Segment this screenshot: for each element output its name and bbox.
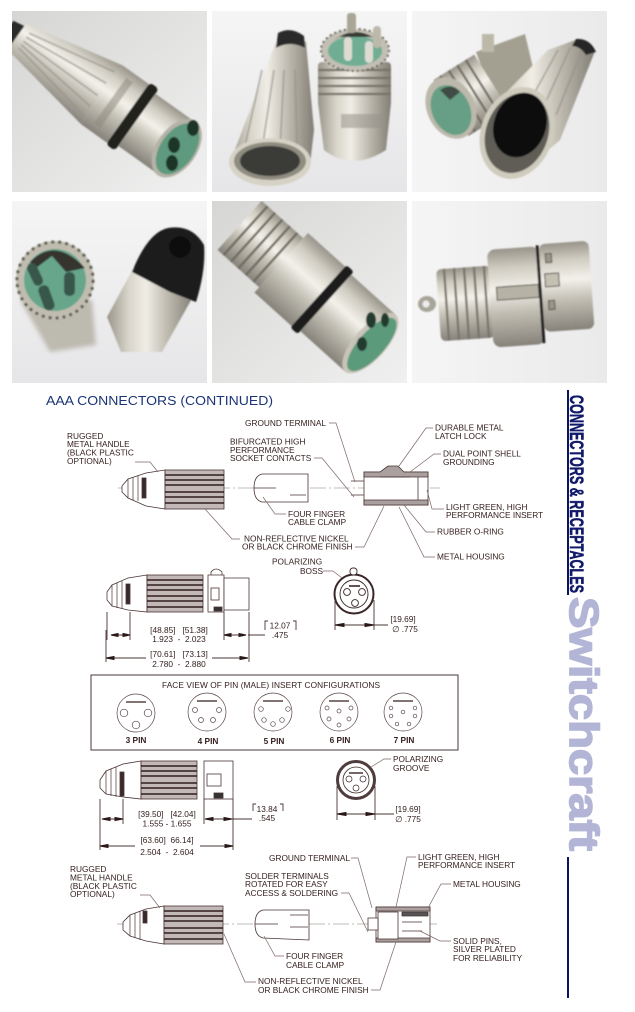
labels: female connector callouts: BIFURCATED HIGH xyxy=(230,436,305,446)
labels: female connector callouts: LIGHT GREEN, HIGH xyxy=(446,502,527,512)
sidebar heading: CONNECTORS & RECEPTACLES xyxy=(565,395,586,593)
labels: female connector callouts: SOCKET CONTACTS xyxy=(230,453,312,463)
labels: groove: ∅ .775 xyxy=(395,814,421,824)
labels: side view dimensions: 1.923 - 2.023 xyxy=(152,634,206,644)
labels: female connector callouts: CABLE CLAMP xyxy=(288,517,347,527)
labels: male connector callouts: SOLDER TERMINALS xyxy=(245,871,329,881)
labels: male connector callouts: PERFORMANCE INSERT xyxy=(418,860,515,870)
labels: male side view dimensions: .545 xyxy=(259,813,275,823)
labels: pin counts: 4 PIN xyxy=(198,736,218,746)
labels: side view dimensions xyxy=(150,620,291,669)
photo: connector with latch lock xyxy=(412,201,607,383)
labels: male side view dimensions: 1.555 - 1.655 xyxy=(143,818,192,828)
labels: male connector callouts: RUGGED xyxy=(70,864,106,874)
labels: pin counts xyxy=(126,735,414,746)
labels: male side view dimensions: [39.50] [42.04] xyxy=(138,809,196,819)
labels: side view dimensions: 2.780 - 2.880 xyxy=(152,659,206,669)
labels: boss xyxy=(272,556,418,634)
icon: 7 pin xyxy=(384,693,422,731)
labels: female connector callouts: PERFORMANCE xyxy=(230,445,295,455)
labels: female connector callouts: OR BLACK CHROME FINISH xyxy=(242,542,353,552)
labels: pin counts: 7 PIN xyxy=(394,735,414,745)
labels: male side view dimensions: [63.60] 66.14] xyxy=(140,835,194,845)
diagram: male connector side view with dimensions xyxy=(100,754,443,857)
icon: 6 pin xyxy=(320,693,358,731)
labels: female connector callouts: GROUNDING xyxy=(443,457,495,467)
diagram: female connector side view with dimensions xyxy=(106,556,418,669)
labels: male connector callouts: METAL HOUSING xyxy=(453,879,521,889)
title: AAA CONNECTORS (CONTINUED) xyxy=(46,393,273,408)
labels: male connector callouts xyxy=(70,852,523,995)
photo: assembled female connector xyxy=(12,11,207,192)
labels: male connector callouts: OR BLACK CHROME FINISH xyxy=(258,985,369,995)
labels: groove: [19.69] xyxy=(395,804,421,814)
labels: female connector callouts: GROUND TERMINAL xyxy=(245,418,326,428)
labels: male connector callouts: NON-REFLECTIVE NICKEL xyxy=(258,976,363,986)
icon: 5 pin xyxy=(254,693,292,731)
labels: female connector callouts: LATCH LOCK xyxy=(435,431,487,441)
labels: side view dimensions: [48.85] [51.38] xyxy=(150,625,208,635)
icon: polarizing boss face xyxy=(334,568,374,614)
labels: female connector callouts: RUBBER O-RING xyxy=(437,526,504,536)
diagram: male connector exploded view xyxy=(70,852,523,995)
labels: male connector callouts: (BLACK PLASTIC xyxy=(70,881,137,891)
labels: female connector callouts: RUGGED xyxy=(67,431,103,441)
labels: male connector callouts: ACCESS & SOLDERING xyxy=(245,888,338,898)
sidebar brand: Switchcraft xyxy=(561,597,607,851)
labels: boss: [19.69] xyxy=(390,614,416,624)
labels: male connector callouts: LIGHT GREEN, HIGH xyxy=(418,852,499,862)
photo: handle and insert with solder pins xyxy=(212,11,407,192)
photo: threaded female connector xyxy=(211,194,410,385)
labels: male connector callouts: SILVER PLATED xyxy=(453,944,516,954)
labels: female connector callouts: NON-REFLECTIVE NICKEL xyxy=(244,534,349,544)
labels: groove xyxy=(393,754,443,824)
labels: side view dimensions: 12.07 xyxy=(270,620,291,630)
panel: face view of pin insert configurations: FACE VIEW OF PIN (MALE) INSERT CONFIGURATIONS xyxy=(162,680,380,690)
labels: male connector callouts: OPTIONAL) xyxy=(70,889,115,899)
icon: polarizing groove face xyxy=(338,762,374,798)
icon: 3 pin xyxy=(117,694,155,732)
labels: male connector callouts: METAL HANDLE xyxy=(70,872,133,882)
labels: pin counts: 3 PIN xyxy=(126,735,146,745)
labels: male connector callouts: FOUR FINGER xyxy=(286,951,343,961)
labels: female connector callouts: FOUR FINGER xyxy=(288,509,345,519)
diagram: female connector exploded view xyxy=(67,418,543,562)
labels: female connector callouts xyxy=(67,418,543,562)
labels: female connector callouts: DURABLE METAL xyxy=(435,422,504,432)
labels: boss: BOSS xyxy=(300,566,324,576)
labels: pin counts: 5 PIN xyxy=(264,736,284,746)
sidebar rule xyxy=(567,857,569,998)
labels: female connector callouts: (BLACK PLASTIC xyxy=(67,448,134,458)
labels: boss: ∅ .775 xyxy=(392,624,418,634)
labels: boss: POLARIZING xyxy=(272,556,322,566)
labels: female connector callouts: OPTIONAL) xyxy=(67,456,112,466)
photo: open handle beside threaded insert xyxy=(412,11,607,192)
labels: male side view dimensions xyxy=(138,804,278,857)
labels: male connector callouts: ROTATED FOR EASY xyxy=(245,879,328,889)
labels: female connector callouts: METAL HANDLE xyxy=(67,439,130,449)
labels: female connector callouts: METAL HOUSING xyxy=(437,552,505,562)
labels: female connector callouts: DUAL POINT SHELL xyxy=(443,448,521,458)
photo: insert face and black plastic boot xyxy=(12,201,207,383)
labels: groove: POLARIZING xyxy=(393,754,443,764)
labels: male connector callouts: FOR RELIABILITY xyxy=(453,953,523,963)
labels: male side view dimensions: 2.504 - 2.604 xyxy=(140,847,194,857)
labels: groove: GROOVE xyxy=(393,763,430,773)
labels: female connector callouts: PERFORMANCE INSERT xyxy=(446,510,543,520)
labels: male connector callouts: CABLE CLAMP xyxy=(286,960,345,970)
labels: male connector callouts: SOLID PINS, xyxy=(453,936,502,946)
labels: male side view dimensions: 13.84 xyxy=(257,804,278,814)
icon: 4 pin xyxy=(188,693,226,731)
labels: pin counts: 6 PIN xyxy=(330,735,350,745)
labels: side view dimensions: .475 xyxy=(272,630,288,640)
labels: male connector callouts: GROUND TERMINAL xyxy=(269,853,350,863)
panel: face view of pin insert configurations xyxy=(91,675,458,750)
labels: side view dimensions: [70.61] [73.13] xyxy=(150,649,208,659)
